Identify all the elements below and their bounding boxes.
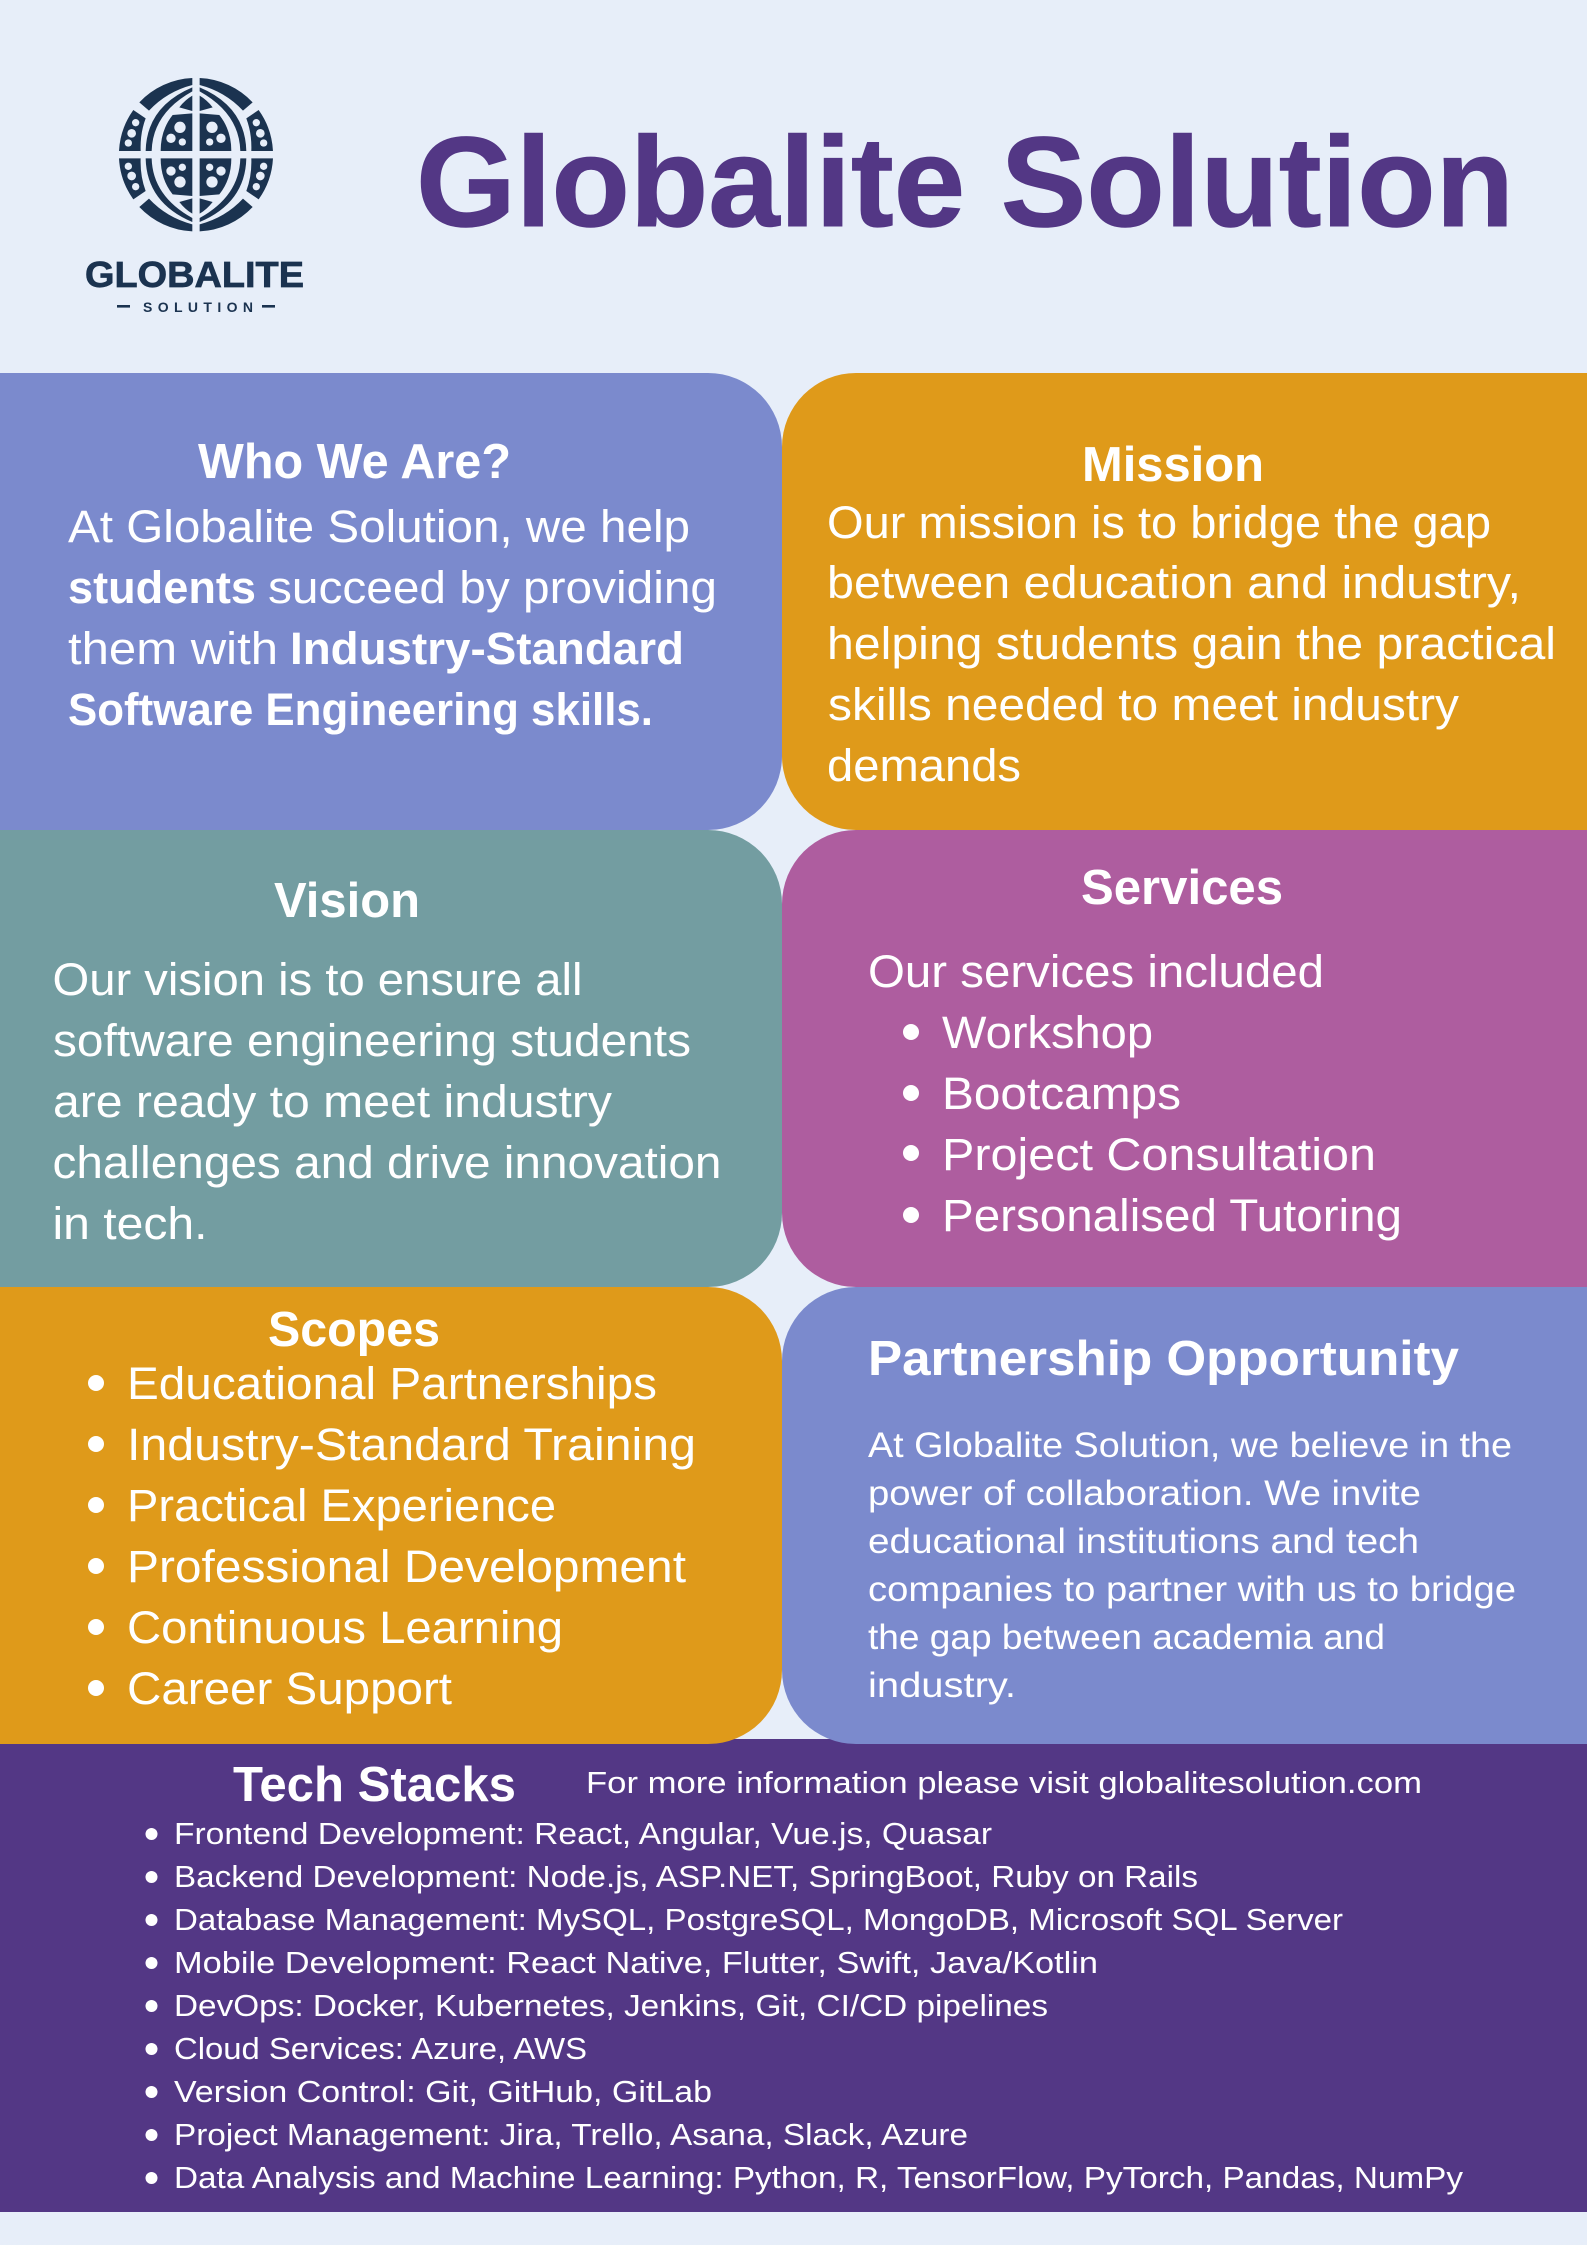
body text: succeed by providing xyxy=(268,562,717,613)
body text: industry. xyxy=(868,1666,1016,1705)
body text: Software Engineering skills. xyxy=(68,684,653,735)
panel: partnership opportunity xyxy=(782,1287,1587,1744)
body text: educational institutions and tech xyxy=(868,1522,1419,1561)
body text: the gap between academia and xyxy=(868,1618,1385,1657)
body text xyxy=(868,1426,1516,1705)
body text: between education and industry, xyxy=(827,557,1521,608)
tech stack list: DevOps: Docker, Kubernetes, Jenkins, Git, CI/CD pipelines xyxy=(174,1988,1048,2023)
body text: At Globalite Solution, we believe in the xyxy=(868,1426,1512,1465)
body text xyxy=(827,497,1556,791)
heading: tech stacks: Tech Stacks xyxy=(233,1758,516,1812)
body text: are ready to meet industry xyxy=(53,1076,613,1127)
scopes list xyxy=(88,1358,696,1714)
body text: companies to partner with us to bridge xyxy=(868,1570,1516,1609)
tech stack list: Frontend Development: React, Angular, Vue.js, Quasar xyxy=(174,1816,992,1851)
heading: vision: Vision xyxy=(274,874,420,928)
body text: challenges and drive innovation xyxy=(52,1137,721,1188)
panel: scopes xyxy=(0,1287,782,1744)
logo tagline: SOLUTION xyxy=(143,299,253,315)
panel: services xyxy=(782,830,1587,1287)
scopes list: Professional Development xyxy=(127,1541,687,1592)
logo xyxy=(85,78,304,315)
body text xyxy=(68,501,717,735)
body text: Our mission is to bridge the gap xyxy=(827,497,1491,548)
scopes list: Continuous Learning xyxy=(127,1602,563,1653)
services list xyxy=(903,1007,1402,1241)
icon: globe xyxy=(119,78,273,231)
tech stack list: Cloud Services: Azure, AWS xyxy=(174,2031,587,2066)
tech stack list: Data Analysis and Machine Learning: Python, R, TensorFlow, PyTorch, Pandas, NumPy xyxy=(174,2160,1464,2195)
heading: services: Services xyxy=(1081,861,1283,915)
scopes list: Industry-Standard Training xyxy=(127,1419,696,1470)
heading: mission: Mission xyxy=(1082,438,1264,492)
services list: Bootcamps xyxy=(942,1068,1181,1119)
services intro: Our services included xyxy=(868,946,1324,997)
services list: Workshop xyxy=(942,1007,1153,1058)
tech stack list: Database Management: MySQL, PostgreSQL, MongoDB, Microsoft SQL Server xyxy=(174,1902,1343,1937)
body text: demands xyxy=(827,740,1021,791)
body text: in tech. xyxy=(52,1198,208,1249)
tech stack list: Backend Development: Node.js, ASP.NET, SpringBoot, Ruby on Rails xyxy=(174,1859,1198,1894)
body text: Our vision is to ensure all xyxy=(52,954,582,1005)
body text: power of collaboration. We invite xyxy=(868,1474,1421,1513)
body text xyxy=(52,954,721,1249)
body text: Industry-Standard xyxy=(290,623,684,674)
scopes list: Practical Experience xyxy=(127,1480,556,1531)
services list: Project Consultation xyxy=(942,1129,1376,1180)
body text: helping students gain the practical xyxy=(827,618,1556,669)
scopes list: Career Support xyxy=(127,1663,453,1714)
tech stack list xyxy=(146,1816,1464,2195)
services list: Personalised Tutoring xyxy=(942,1190,1402,1241)
body text: students xyxy=(68,562,256,613)
body text: them with xyxy=(68,623,278,674)
heading: who we are: Who We Are? xyxy=(198,435,511,489)
body text: software engineering students xyxy=(53,1015,691,1066)
scopes list: Educational Partnerships xyxy=(127,1358,657,1409)
website note: For more information please visit globalitesolution.com xyxy=(586,1765,1422,1800)
panel: mission xyxy=(782,373,1587,830)
logo wordmark: GLOBALITE xyxy=(85,254,304,295)
panel: tech stacks xyxy=(0,1739,1587,2212)
panel: vision xyxy=(0,830,782,1287)
panel: who we are xyxy=(0,373,782,830)
tech stack list: Version Control: Git, GitHub, GitLab xyxy=(174,2074,712,2109)
body text: skills needed to meet industry xyxy=(828,679,1460,730)
heading: scopes: Scopes xyxy=(268,1303,440,1357)
tech stack list: Project Management: Jira, Trello, Asana, Slack, Azure xyxy=(174,2117,968,2152)
tech stack list: Mobile Development: React Native, Flutter, Swift, Java/Kotlin xyxy=(174,1945,1098,1980)
title: Globalite Solution xyxy=(416,111,1514,254)
body text: At Globalite Solution, we help xyxy=(68,501,690,552)
heading: partnership opportunity: Partnership Opportunity xyxy=(868,1332,1459,1386)
